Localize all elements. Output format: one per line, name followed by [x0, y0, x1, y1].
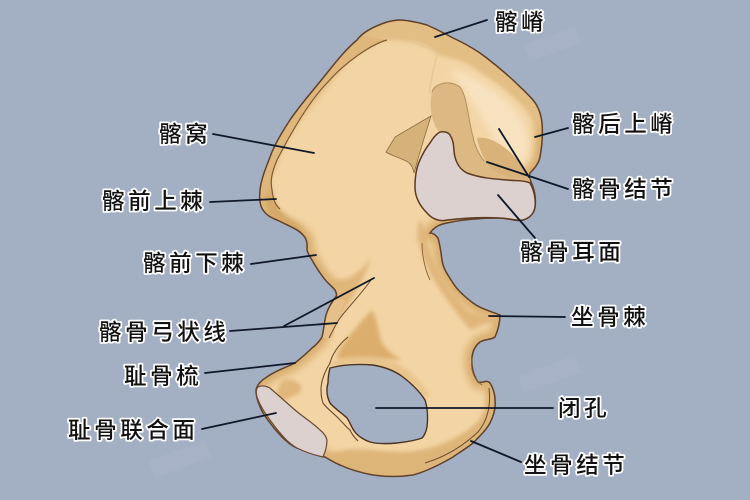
label: anterior superior iliac spine: 髂前上棘: [102, 189, 206, 214]
line: anterior superior iliac spine: [210, 199, 276, 202]
line: anterior inferior iliac spine: [251, 255, 316, 264]
notch shade: [418, 222, 500, 330]
pubic ramus shade: [277, 380, 301, 402]
label: iliac crest: 髂嵴: [495, 10, 547, 35]
pubic symphysis surface: [256, 386, 327, 457]
line: iliac tuberosity: [487, 129, 568, 189]
hip bone illustration: [252, 18, 548, 482]
watermark: [149, 26, 581, 478]
auricular surface: [415, 132, 535, 221]
ASIS lower shade: [264, 190, 301, 231]
bone shading: [252, 18, 548, 482]
label: iliac fossa: 髂窝: [159, 122, 211, 147]
ischial fold line: [425, 388, 490, 463]
line: ischial spine: [489, 316, 565, 317]
edge darkening: [256, 20, 542, 476]
crest band: [362, 21, 542, 128]
line: obturator foramen: [376, 407, 553, 409]
lower band: [332, 393, 489, 471]
label: ischial spine: 坐骨棘: [571, 305, 649, 330]
obturator rim line: [321, 337, 358, 441]
line: arcuate line: [230, 278, 374, 331]
wing highlight: [450, 70, 528, 165]
label: posterior superior iliac spine: 髂后上嵴: [572, 112, 676, 137]
line: pubic symphysis surface: [202, 413, 276, 429]
notch fold line: [422, 243, 430, 280]
label: iliac tuberosity: 髂骨结节: [572, 177, 676, 202]
acetabular shadow: [338, 310, 402, 360]
iliac tuberosity area: [477, 138, 530, 180]
ridge highlight: [404, 41, 438, 94]
iliac fossa rim line: [271, 40, 387, 209]
label: arcuate line: 髂骨弓状线: [99, 320, 230, 345]
wing fold shadow: [386, 116, 431, 173]
obturator foramen: [327, 364, 428, 444]
label: ischial tuberosity: 坐骨结节: [524, 453, 628, 478]
left rim band: [260, 36, 386, 212]
arcuate line: [329, 280, 371, 338]
label: pubic symphysis surface: 耻骨联合面: [68, 418, 199, 443]
leader lines: [202, 20, 568, 462]
line: auricular surface: [498, 195, 535, 238]
bone silhouette: [256, 20, 542, 476]
line: posterior superior iliac spine: [535, 128, 568, 137]
line: ischial tuberosity: [471, 441, 521, 462]
AIIS to hip shade: [335, 258, 372, 319]
label: auricular surface: 髂骨耳面: [520, 240, 624, 265]
labels: [68, 10, 676, 478]
line: iliac fossa: [213, 134, 314, 153]
bone outline: [256, 20, 542, 476]
label: obturator foramen: 闭孔: [558, 396, 610, 421]
sacral groove: [431, 83, 530, 183]
label: pecten pubis: 耻骨梳: [124, 364, 202, 389]
line: iliac crest: [435, 20, 487, 37]
label: anterior inferior iliac spine: 髂前下棘: [143, 251, 247, 276]
line: pecten pubis: [205, 363, 295, 373]
